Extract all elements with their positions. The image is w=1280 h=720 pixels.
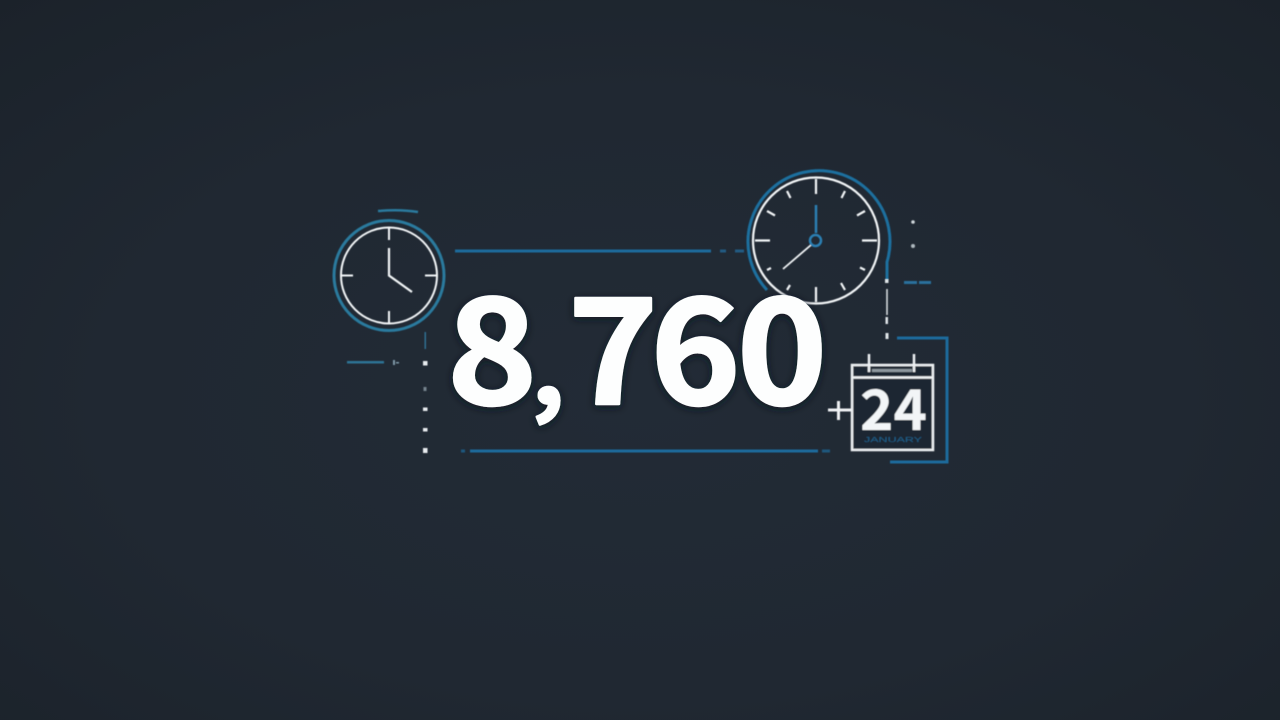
icon: calendar +24 xyxy=(828,354,933,450)
main number: 760 xyxy=(568,238,827,446)
left tick marks xyxy=(347,332,428,453)
icon: right clock xyxy=(748,171,890,304)
calendar header band xyxy=(872,369,912,372)
calendar small caption: JANUARY xyxy=(864,437,923,444)
plus sign xyxy=(828,401,851,420)
calendar day number: 24 xyxy=(860,366,927,447)
icon: left clock xyxy=(334,210,444,330)
calendar frame xyxy=(852,354,933,450)
main number: , xyxy=(532,295,565,432)
top blue rule xyxy=(455,250,744,252)
right dots and dashes xyxy=(885,220,931,339)
bottom blue rule xyxy=(461,450,830,452)
blue bracket xyxy=(890,338,947,462)
main number: 8 xyxy=(447,238,537,446)
